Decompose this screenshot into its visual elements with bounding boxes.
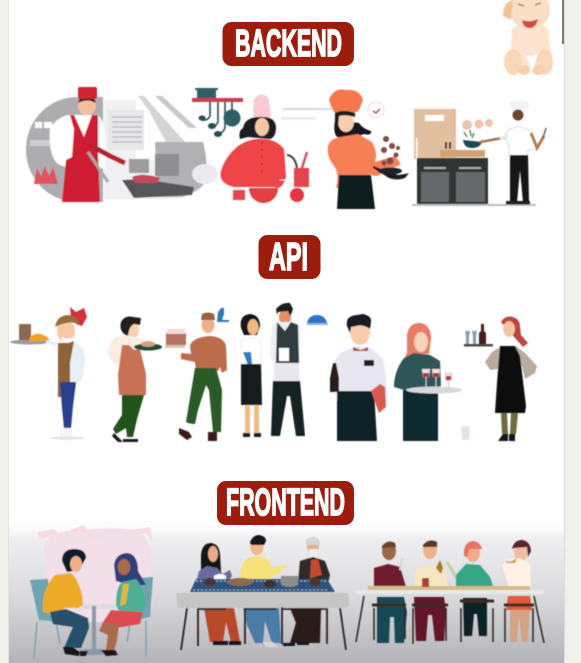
illustration: couple at small table [30,525,153,658]
illustration: waiter with cake [165,312,227,441]
illustration: barista waitress [10,307,87,441]
illustration: family at long table [176,535,349,650]
illustration: waitress with green tray [107,317,162,442]
illustration: waitress with wine tray [464,317,537,441]
heading: BACKEND: BACKEND [235,23,342,65]
illustration: woman in skirt [217,308,262,437]
illustration: waitress with glasses tray [394,323,470,441]
heading: API: API [269,236,308,279]
heading: FRONTEND: FRONTEND [226,482,345,524]
illustration: friends at counter [356,540,544,644]
heading: BACKEND [222,22,354,66]
illustration: kitchen chef [412,100,546,206]
illustration: grill chef scene [26,87,218,202]
illustration: waiter with wine [330,314,387,441]
icon: baby [503,0,553,75]
heading: API [258,235,320,279]
illustration: chef flipping pan [328,89,409,209]
illustration: pastry chef [192,88,333,203]
illustration: waiter in vest [270,303,328,436]
heading: FRONTEND [217,481,354,525]
